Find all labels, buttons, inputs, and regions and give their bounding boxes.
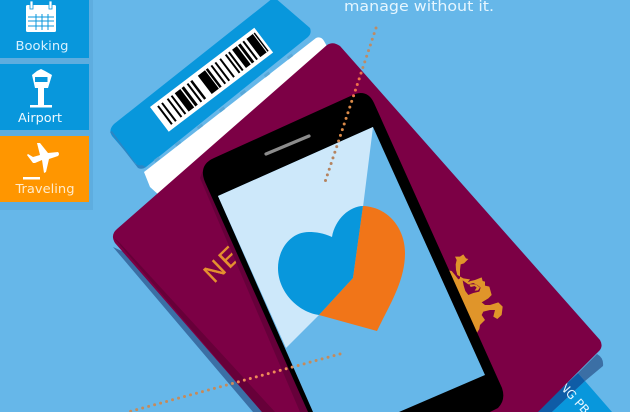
icon: control tower [30,69,52,108]
barcode [150,28,273,132]
panel: traveling [0,136,89,202]
screen highlight [218,127,373,348]
sidebar navigation [0,0,93,210]
phone screen [218,127,485,412]
phone shadow on passport [200,170,308,412]
label: booking: Booking [16,38,68,53]
ticket lower edge shade [110,131,146,169]
passport shadow [113,247,603,412]
boarding pass [110,0,328,196]
ticket perforations [154,53,293,163]
icon: airplane [23,143,59,180]
dotted leader line: bottom [128,354,340,412]
passport [113,43,602,412]
passport lower edge shade [114,238,275,412]
passport lettering: NE [197,239,247,288]
phone [203,93,503,412]
ticket blue body [110,0,311,168]
heart: blue half [278,206,363,315]
stub body [552,381,612,412]
lion emblem [447,254,503,333]
passport cover [113,43,602,412]
icon: calendar [26,1,56,32]
ticket white stub [144,37,328,196]
speaker [266,136,309,154]
phone body [203,93,503,412]
label: airport: Airport [18,110,62,125]
heart: orange half [319,206,405,331]
panel: airport [0,64,89,130]
stub dark band [536,373,585,412]
bottom ticket stub [536,373,612,412]
label: traveling: Traveling [14,181,74,196]
panel: booking [0,0,89,58]
dotted leader line: top [325,28,376,182]
